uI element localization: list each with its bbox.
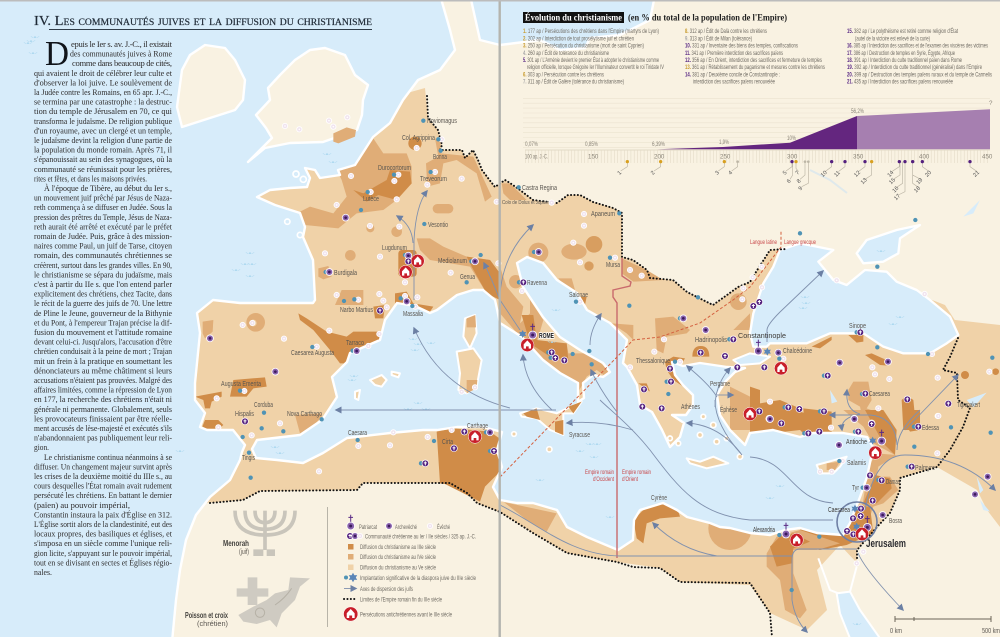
city labels: Bosra bbox=[889, 518, 902, 525]
text block: paragraph 2: de Pline le Jeune, gouverneur de la Bithynie bbox=[34, 308, 172, 318]
text block: paragraph 2: mit un frein à la pratique en soumettant les bbox=[34, 356, 173, 366]
scale bar bbox=[890, 616, 1000, 635]
city labels: Edessa bbox=[922, 425, 939, 432]
chronology column 2: 11. 341 ap / Première interdiction des sacrifices païens bbox=[685, 51, 783, 57]
area chart bbox=[525, 98, 993, 160]
text block: paragraph 1: transforma le judaïsme. De religion publique bbox=[34, 116, 172, 126]
text block: paragraph 1: d'un royaume, avec un clergé et un temple, bbox=[34, 125, 172, 135]
text block: paragraph 3: cours desquelles l'État romain avait rudement bbox=[34, 481, 173, 491]
city labels: Durocortorum bbox=[378, 165, 411, 172]
text block: paragraph 2: un mouvement juif prêché par Jésus de Naza- bbox=[34, 193, 172, 203]
Sicily, Crete and small islands bbox=[512, 402, 743, 468]
city labels: Sinope bbox=[849, 323, 866, 330]
city labels: Bonna bbox=[433, 154, 447, 161]
chronology column 2: 9. 313 ap / Édit de Milan (tolérance) bbox=[685, 35, 752, 42]
legend divider bbox=[326, 507, 328, 627]
legend: church hierarchy bbox=[346, 515, 450, 531]
city labels: Burdigala bbox=[334, 270, 357, 277]
chart axis labels: 200 bbox=[654, 154, 665, 160]
city labels: Ravenna bbox=[527, 280, 547, 287]
city labels: Caesarea bbox=[869, 391, 890, 398]
text block: paragraph 2: générale ni permanente. Globalement, seuls bbox=[34, 404, 173, 414]
Atlantic Ocean and North Sea bbox=[0, 0, 455, 637]
chart heading bbox=[523, 12, 787, 24]
city labels: Athènes bbox=[681, 404, 700, 411]
chronology column 2: 12. 356 ap / En Orient, interdiction des sacrifices et fermeture de temples bbox=[685, 58, 822, 64]
text block: paragraph 2: dénonciateurs au même châtiment si leurs bbox=[34, 365, 173, 375]
chart axis labels: 400 bbox=[919, 154, 930, 160]
city labels: Cyrène bbox=[651, 495, 667, 502]
text block: paragraph 2: le christianisme se sépara du judaïsme, mais bbox=[34, 269, 173, 279]
legend: dispersion axes: Axes de dispersion des juifs bbox=[360, 587, 413, 593]
labels: western and eastern empire: Empire romain bbox=[585, 470, 614, 476]
chart values: ? bbox=[989, 100, 993, 107]
diffusion patches: Libya bbox=[502, 502, 752, 550]
chronology column 2: 14. 381 ap / Deuxième concile de Constantinople : bbox=[685, 72, 780, 78]
chart values: 0,07% bbox=[525, 141, 538, 148]
text block: paragraph 2: pression des prêtres du Temple, Jésus de Naza- bbox=[34, 212, 172, 222]
legend: christian community: Communauté chrétienne au Ier / IIe siècles / 325 ap. J.-C. bbox=[365, 534, 476, 540]
markers: Iberia, Southern Gaul, Africa bbox=[206, 291, 498, 480]
chronology column 2: 13. 361 ap / Rétablissement du paganisme et mesures contre les chrétiens bbox=[685, 65, 825, 71]
label: fish and cross: Poisson et croix bbox=[185, 611, 228, 620]
labels: western and eastern empire: d'Orient bbox=[622, 477, 638, 483]
chronology column 3: (autel de la victoire est enlevé de la curie) bbox=[855, 36, 930, 42]
city labels: Caesarea bbox=[828, 507, 850, 514]
text block: paragraph 2: gion. bbox=[34, 442, 49, 452]
timeline event dots and leaders: 11 bbox=[833, 170, 842, 178]
city labels: Salamis bbox=[847, 460, 866, 467]
chronology column 3: 15. 382 ap / Le polythéisme est retiré comme religion d'État bbox=[847, 28, 958, 35]
chronology column 2 bbox=[685, 28, 825, 86]
icon: fish and cross bbox=[237, 577, 310, 627]
labels: western and eastern empire: d'Occident bbox=[593, 477, 614, 483]
text block: paragraph 2: ment accusés de lèse-majesté et exécutés s'ils bbox=[34, 423, 173, 433]
chronology column 1: 1. 177 ap / Persécutions des chrétiens dans l'Empire (martyrs de Lyon) bbox=[523, 29, 659, 35]
city labels: Syracuse bbox=[569, 432, 590, 439]
chart values: 0,85% bbox=[585, 141, 598, 148]
city labels: Nova Carthago bbox=[287, 411, 322, 418]
text block: paragraph 2: c'est à partir du IIe s. que l'on entend parler bbox=[34, 279, 172, 289]
city labels: Alexandria bbox=[753, 527, 775, 534]
limits of the Roman Empire bbox=[210, 96, 970, 637]
text block: paragraph 3: gion licite, s'appuyant sur le pouvoir impérial, bbox=[34, 548, 172, 558]
chronology column 1: 7. 311 ap / Édit de Galère (tolérance du christianisme) bbox=[523, 79, 624, 86]
timeline event dots and leaders: 2 bbox=[650, 170, 657, 177]
legend: diffusion 4th century: Diffusion du christianisme au IVe siècle bbox=[360, 555, 436, 561]
text block: paragraph 2: À l'époque de Tibère, au début du Ier s., bbox=[44, 183, 172, 193]
text block: paragraph 3: s'imposa en un siècle comme l'unique reli- bbox=[34, 538, 172, 548]
text block: paragraph 2: n'abandonnaient pas publiquement leur reli- bbox=[34, 433, 172, 443]
Sea of Azov bbox=[857, 225, 920, 263]
city labels: Noviomagus bbox=[427, 118, 457, 125]
timeline event dots and leaders: 13 bbox=[860, 177, 869, 186]
river bbox=[810, 170, 847, 193]
Jerusalem circle bbox=[837, 502, 877, 542]
timeline event dots and leaders: 7 bbox=[795, 170, 801, 177]
text block: paragraph 2: en 177, la recherche des chrétiens n'était ni bbox=[34, 394, 173, 404]
chronology column 2: interdiction des sacrifices païens renouvelée bbox=[693, 80, 775, 86]
timeline event dots and leaders: 6 bbox=[786, 178, 793, 185]
markers: Levant and Egypt bbox=[766, 413, 993, 592]
scale bar: 0 km bbox=[890, 628, 902, 635]
text block: paragraph 1: le judaïsme devint la religion d'une partie de bbox=[34, 135, 172, 145]
city labels: Colo de Dolus et Jupiter bbox=[502, 200, 549, 206]
city labels: Narbo Martius bbox=[340, 307, 373, 314]
legend: church hierarchy: Archevêché bbox=[395, 525, 417, 531]
text block: paragraph 3: les crises de la deuxième moitié du IIIe s., au bbox=[34, 471, 173, 481]
city labels: Castra Regina bbox=[522, 185, 557, 192]
timeline event dots and leaders bbox=[617, 160, 981, 202]
city labels: Tyr bbox=[852, 485, 859, 492]
text block: paragraph 1: communauté se réunissait pour les prières, bbox=[34, 164, 172, 174]
diffusion patches: Iberia and Africa bbox=[195, 290, 502, 502]
chart axis labels: 350 bbox=[853, 154, 864, 160]
city labels: Lugdunum bbox=[382, 245, 407, 252]
text block: paragraph 3: diffuser. Un changement majeur survint après bbox=[34, 461, 173, 471]
timeline event dots and leaders: 18 bbox=[913, 186, 922, 194]
chart axis labels: 150 bbox=[588, 154, 599, 160]
city labels: Cirta bbox=[442, 439, 453, 446]
chronology column 1 bbox=[523, 29, 664, 86]
Baltic Sea bbox=[470, 0, 655, 50]
label: Jerusalem: Jerusalem bbox=[866, 538, 906, 550]
text block: paragraph 2: le récit de la guerre des juifs de 70. Une lettre bbox=[34, 298, 172, 308]
chart values: 1,9% bbox=[719, 139, 729, 146]
text block: paragraph 2: les provocateurs finissaient par être réelle- bbox=[34, 413, 172, 423]
timeline event dots and leaders: 1 bbox=[617, 170, 623, 177]
city labels: Augusta Emerita bbox=[221, 381, 261, 388]
text block: paragraph 2: naires comme Paul, un juif de Tarse, citoyen bbox=[34, 241, 173, 251]
text block: paragraph 1 bbox=[34, 39, 173, 183]
islands of Britain, Atlantic and Western Mediterranean bbox=[285, 127, 356, 238]
page spine bbox=[498, 0, 501, 637]
city labels: Tigranakert bbox=[957, 402, 980, 409]
axes of Jewish dispersion arrows bbox=[336, 191, 995, 632]
legend: diffusion 5th century: Diffusion du christianisme au Ve siècle bbox=[360, 566, 436, 572]
text block: paragraph 1: d'observer la loi juive. Le soulèvement de bbox=[34, 77, 172, 87]
city labels: Thessalonique bbox=[636, 358, 670, 365]
Corsica, Sardinia, Balearics bbox=[355, 315, 482, 400]
text block: paragraph 3: persécuté les chrétiens. En battant le dernier bbox=[34, 490, 172, 500]
text block: paragraph 3: (païen) au pouvoir impérial, bbox=[34, 500, 130, 510]
legend: church hierarchy: Patriarcat bbox=[359, 525, 377, 531]
labels: language boundary: Langue latine bbox=[750, 240, 777, 246]
city labels: Caesara bbox=[348, 430, 367, 437]
chronology column 1: 5. 301 ap / L'Arménie devient le premier État à adopter le christianisme comme bbox=[523, 57, 659, 64]
timeline event dots and leaders: 5 bbox=[782, 170, 789, 177]
Cyprus bbox=[817, 457, 847, 473]
chronology column 1: religion officielle, lorsque Grégoire Ier l'Illuminateur convertit le roi Tiridate IV bbox=[527, 65, 664, 71]
chart axis labels bbox=[525, 154, 993, 160]
text block: paragraph 1: la Judée contre les Romains, en 65 apr. J.-C., bbox=[34, 87, 172, 97]
text block: paragraph 1: comme dans beaucoup de cités, bbox=[72, 58, 172, 68]
empire territory, pale diffusion bbox=[190, 88, 1000, 630]
chronology column 1: 2. 202 ap / Interdiction de tout prosélytisme juif et chrétien bbox=[523, 36, 634, 42]
text block: paragraph 3: Le christianisme continua néanmoins à se bbox=[44, 452, 172, 462]
chart area: light purple, after 350 bbox=[857, 109, 990, 149]
label: menorah: (juif) bbox=[239, 549, 249, 556]
Red Sea and gulfs bbox=[818, 477, 990, 637]
title: IV. Les communautés juives et la diffusion du christianisme bbox=[34, 13, 373, 28]
chart axis labels: 250 bbox=[720, 154, 731, 160]
text block: paragraph 1: tion du temple de Jérusalem en 70, ce qui bbox=[34, 106, 173, 116]
chronology column 1: 3. 250 ap / Persécution du christianisme (mort de saint Cyprien) bbox=[523, 44, 644, 50]
labels: language boundary: Langue grecque bbox=[784, 240, 816, 246]
label: Rome: ROME bbox=[539, 333, 554, 340]
timeline event dots and leaders: 4 bbox=[728, 170, 734, 177]
city labels: Treveorum bbox=[420, 176, 447, 183]
patches east of the limes bbox=[865, 310, 1000, 335]
labels: western and eastern empire: Empire romain bbox=[622, 470, 651, 476]
city labels: Hispalis bbox=[235, 411, 254, 418]
Black Sea bbox=[733, 200, 987, 407]
timeline event dots and leaders: 19 bbox=[916, 177, 924, 186]
legend: persecutions: Persécutions antichrétiennes avant le IIIe siècle bbox=[360, 612, 452, 618]
text block: paragraph 2: romain, des communautés chrétiennes se bbox=[34, 250, 172, 260]
city labels: Genua bbox=[460, 274, 475, 281]
markers: Italy and Balkans bbox=[516, 185, 746, 412]
text block: paragraph 1: s'épanouissait au sein des synagogues, où la bbox=[34, 154, 172, 164]
timeline event dots and leaders: 12 bbox=[853, 170, 862, 179]
text block: paragraph 3: locaux propres, des basiliques et églises, et bbox=[34, 529, 173, 539]
drop cap: D bbox=[45, 34, 69, 73]
timeline event dots and leaders: 8 bbox=[796, 178, 803, 185]
timeline event dots and leaders: 9 bbox=[798, 186, 804, 192]
city labels: Vesontio bbox=[428, 222, 448, 229]
timeline event dots and leaders: 16 bbox=[892, 186, 900, 194]
timeline event dots and leaders: 10 bbox=[820, 170, 829, 179]
text block: paragraph 1: epuis le Ier s. av. J.-C., il existait bbox=[71, 39, 173, 49]
timeline event dots and leaders: 15 bbox=[888, 177, 897, 186]
city labels: Chalcédoine bbox=[783, 348, 812, 355]
legend: diffusion 3rd century: Diffusion du christianisme au IIIe siècle bbox=[360, 545, 436, 551]
chart axis labels: 100 ap. J.-C. bbox=[525, 154, 548, 160]
label: fish and cross bbox=[185, 611, 228, 628]
chronology column 1: 4. 260 ap / Édit de tolérance du christianisme bbox=[523, 50, 609, 57]
text block: paragraph 3: Constantin instaura la paix d'Église en 312. bbox=[34, 509, 172, 519]
label: menorah: Menorah bbox=[223, 539, 249, 548]
legend: empire limits: Limites de l'Empire romain fin du IIIe siècle bbox=[360, 598, 442, 604]
label: fish and cross: (chrétien) bbox=[197, 621, 228, 628]
text block: paragraph 2 bbox=[34, 183, 173, 452]
lakes bbox=[830, 200, 987, 407]
text block: paragraph 2: reth aurait été arrêté et exécuté par le préfet bbox=[34, 221, 173, 231]
timeline event dots and leaders: 3 bbox=[714, 170, 721, 177]
city labels: Carthage bbox=[467, 423, 488, 430]
city labels: Mursa bbox=[606, 262, 620, 269]
text block: paragraph 3: nales. bbox=[34, 567, 52, 577]
markers: Anatolia bbox=[743, 218, 994, 430]
city labels: Damas bbox=[886, 479, 900, 486]
city labels bbox=[221, 118, 980, 534]
timeline event dots and leaders: 20 bbox=[924, 170, 933, 179]
city labels: Lutèce bbox=[363, 196, 379, 203]
text block: paragraph 2: affaires limitées, comme la répression de Lyon bbox=[34, 385, 173, 395]
Great Britain bbox=[248, 48, 368, 162]
city labels: Apaneum bbox=[591, 211, 615, 218]
top edge bbox=[0, 0, 1000, 2]
city labels: Pergame bbox=[710, 381, 730, 388]
legend: church hierarchy: Évêché bbox=[437, 524, 450, 531]
text block: paragraph 2: et du Pont, à l'empereur Trajan précise la dif- bbox=[34, 317, 172, 327]
text block: paragraph 3: L'Église sortit alors de la clandestinité, eut des bbox=[34, 519, 173, 529]
timeline event dots and leaders: 21 bbox=[972, 170, 981, 179]
city labels: Caesarea Augusta bbox=[291, 350, 334, 357]
city labels: Tarraco bbox=[346, 340, 364, 347]
chart values: 6,39% bbox=[652, 141, 665, 148]
chart heading: (en % du total de la population de l'Empire) bbox=[628, 12, 787, 24]
city labels: Col. Agrippina bbox=[402, 135, 435, 142]
chart heading: Évolution du christianisme bbox=[525, 12, 622, 24]
chronology column 2: 10. 331 ap / Inventaire des biens des temples, confiscations bbox=[685, 44, 798, 50]
markers: Gaul and Britain bbox=[282, 115, 501, 285]
diffusion patches: Italy, Balkans bbox=[500, 183, 750, 395]
diffusion patches: Levant and Egypt bbox=[750, 410, 920, 618]
text block: paragraph 1: se termina par une catastrophe : la destruc- bbox=[34, 97, 172, 107]
text block: paragraph 1: la population du monde romain. Après 71, il bbox=[34, 145, 173, 155]
Sea of Marmara bbox=[733, 353, 770, 365]
chronology column 2: 8. 312 ap / Édit de Dalà contre les chrétiens bbox=[685, 28, 767, 35]
labels: language boundary bbox=[750, 240, 816, 246]
chart values: 56,2% bbox=[851, 108, 864, 115]
chart area: dark purple, up to 350 bbox=[657, 116, 857, 149]
latin/greek language boundary bbox=[500, 230, 781, 477]
text block: paragraph 2: explicitement des chrétiens, chez Tacite, dans bbox=[34, 289, 173, 299]
city labels: Hadrinopolis bbox=[695, 337, 727, 344]
east/west division line bbox=[613, 258, 631, 558]
city labels: Corduba bbox=[254, 402, 273, 409]
chart axis labels: 450 bbox=[982, 154, 993, 160]
text block: paragraph 2: reth commença à se diffuser en Judée. Sous la bbox=[34, 202, 172, 212]
label: menorah bbox=[223, 539, 249, 556]
text block: paragraph 2: devant celui-ci. Jusqu'alors, l'accusation d'être bbox=[34, 337, 172, 347]
chart values: 10% bbox=[787, 135, 796, 142]
legend bbox=[344, 515, 476, 621]
city labels: Constantinople bbox=[738, 333, 786, 340]
icon: menorah bbox=[235, 511, 295, 553]
text block: paragraph 3: tout en se divisant en sectes et Églises régio- bbox=[34, 557, 172, 567]
text block: paragraph 3 bbox=[34, 452, 173, 577]
text block: paragraph 2: chrétien conduisait à la peine de mort ; Trajan bbox=[34, 346, 173, 356]
text block: paragraph 2: accusations n'étaient pas prouvées. Malgré des bbox=[34, 375, 173, 385]
city labels: Éphèse bbox=[720, 405, 737, 414]
legend: jewish diaspora: Implantation significative de la diaspora juive du IIIe siècle bbox=[360, 576, 476, 582]
chronology column 1: 6. 303 ap / Persécution contre les chrétiens bbox=[523, 72, 604, 78]
timeline event dots and leaders: 17 bbox=[893, 193, 902, 202]
text block: paragraph 2: romain de Judée. Puis, grâce à des mission- bbox=[34, 231, 172, 241]
timeline event dots and leaders: 14 bbox=[887, 170, 895, 179]
chart values bbox=[525, 100, 993, 148]
text block: paragraph 2: créèrent, surtout dans les grandes villes. En 90, bbox=[34, 260, 172, 270]
chart axis labels: 300 bbox=[787, 154, 798, 160]
text block: paragraph 2: fusion du mouvement et l'attitude romaine bbox=[34, 327, 172, 337]
city labels: Mediolanum bbox=[438, 258, 467, 265]
Mediterranean Sea bbox=[252, 257, 873, 550]
text block: paragraph 1: des communautés juives à Rome bbox=[70, 49, 172, 59]
chronology column 3 bbox=[847, 28, 992, 86]
labels: western and eastern empire bbox=[585, 470, 651, 483]
city labels: Tingis bbox=[242, 455, 255, 462]
diffusion patches: Anatolia bbox=[730, 335, 999, 430]
city labels: Antioche bbox=[846, 439, 867, 446]
chronology column 3: 21. 435 ap / Interdiction des sacrifices païens renouvelée bbox=[847, 80, 953, 86]
text block: paragraph 1: qui avaient le droit de célébrer leur culte et bbox=[34, 68, 173, 78]
diffusion patches: Gaul bbox=[297, 137, 500, 300]
city labels: Massalia bbox=[403, 311, 423, 318]
city labels: Salonae bbox=[569, 292, 588, 299]
city labels: Palmyre bbox=[915, 465, 935, 472]
Ireland bbox=[177, 45, 245, 127]
text block: paragraph 1: rites et fêtes, et dans les maisons privées. bbox=[34, 173, 147, 183]
